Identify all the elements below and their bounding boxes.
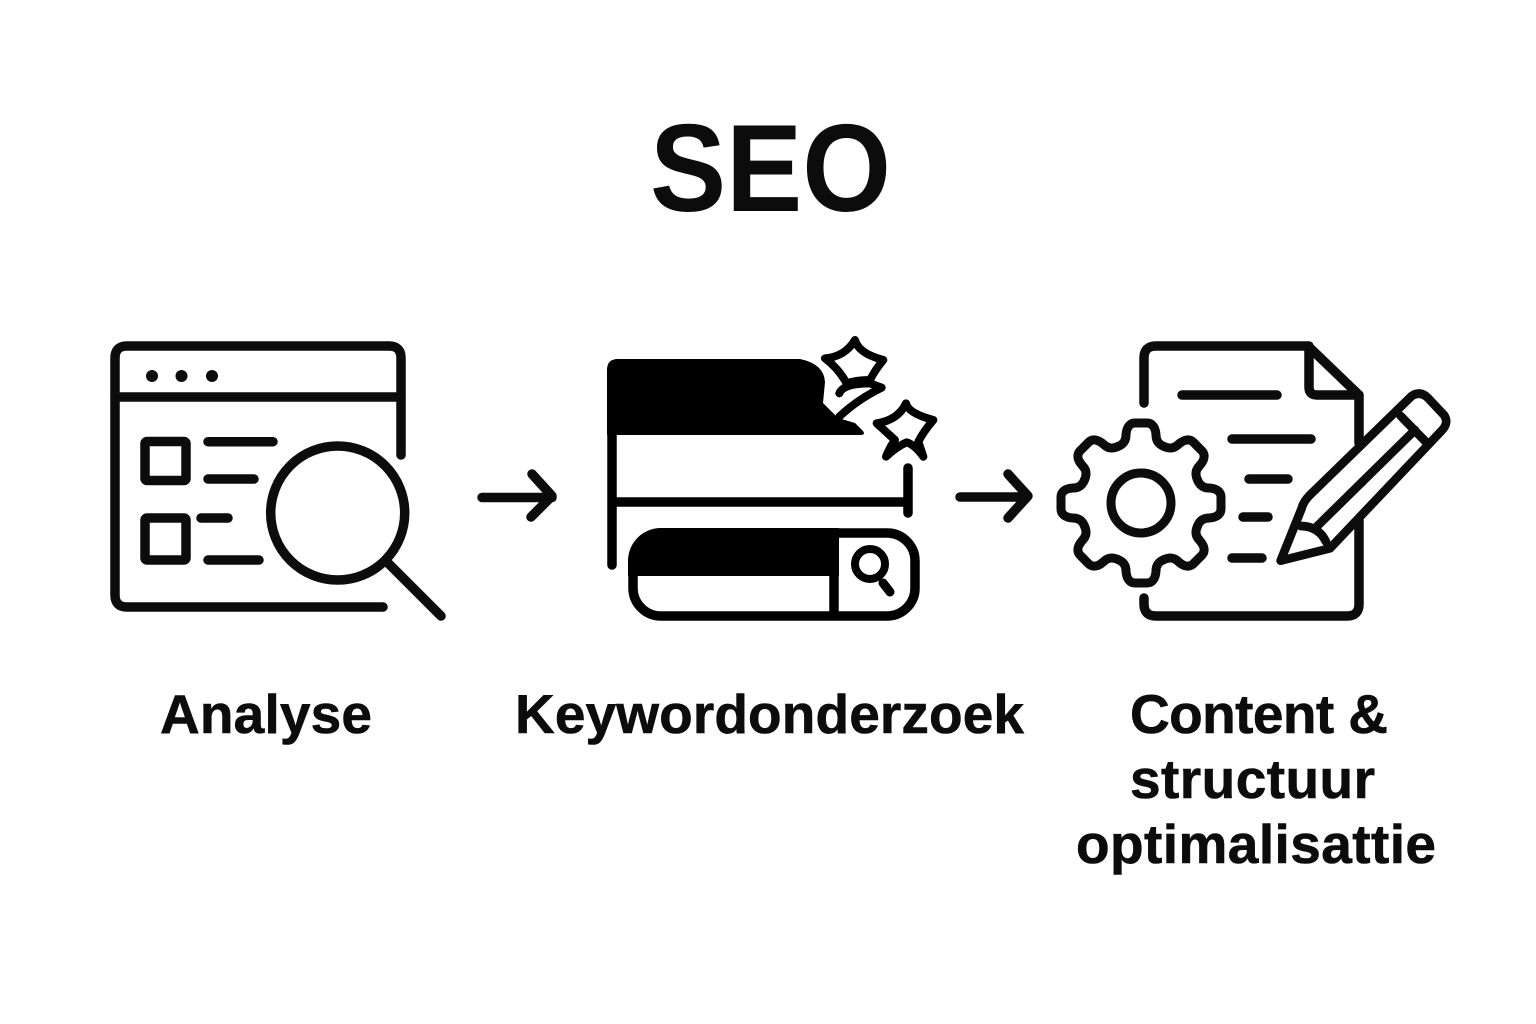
title: SEO: [650, 100, 891, 238]
checkbox top: [145, 442, 186, 480]
label: Analyse: Analyse: [160, 683, 372, 745]
checkbox bottom: [145, 518, 186, 560]
icon: analysis browser window with magnifier: [115, 346, 441, 616]
label: Content & structuur optimalisattie: [1076, 683, 1436, 875]
icon: keyword research bars and sparkles: [607, 340, 933, 616]
browser header line: [115, 392, 401, 402]
browser dots: [146, 370, 218, 382]
document fold: [1309, 346, 1359, 395]
label: Keywordonderzoek: Keywordonderzoek: [515, 683, 1024, 745]
label: Content & structuur optimalisattie: structuur: [1130, 748, 1375, 810]
icon: document, gear and pencil: [1061, 346, 1446, 616]
arrow: analyse to keyword research: [482, 474, 552, 517]
list lines: [201, 442, 273, 560]
label: Content & structuur optimalisattie: optimalisattie: [1076, 813, 1436, 875]
document: [1144, 346, 1359, 616]
arrow: keyword research to content: [960, 474, 1028, 518]
text lines: [1182, 395, 1311, 558]
search bar: [628, 528, 915, 616]
magnifier: [271, 446, 441, 616]
label: Content & structuur optimalisattie: Content &: [1130, 683, 1388, 745]
pencil: [1281, 394, 1446, 561]
sparkle small: [877, 403, 933, 457]
filled top bar: [607, 359, 864, 435]
gear: [1061, 423, 1221, 583]
browser window frame: [115, 346, 401, 607]
bar outline: [612, 435, 908, 565]
sparkle large: [825, 340, 883, 417]
